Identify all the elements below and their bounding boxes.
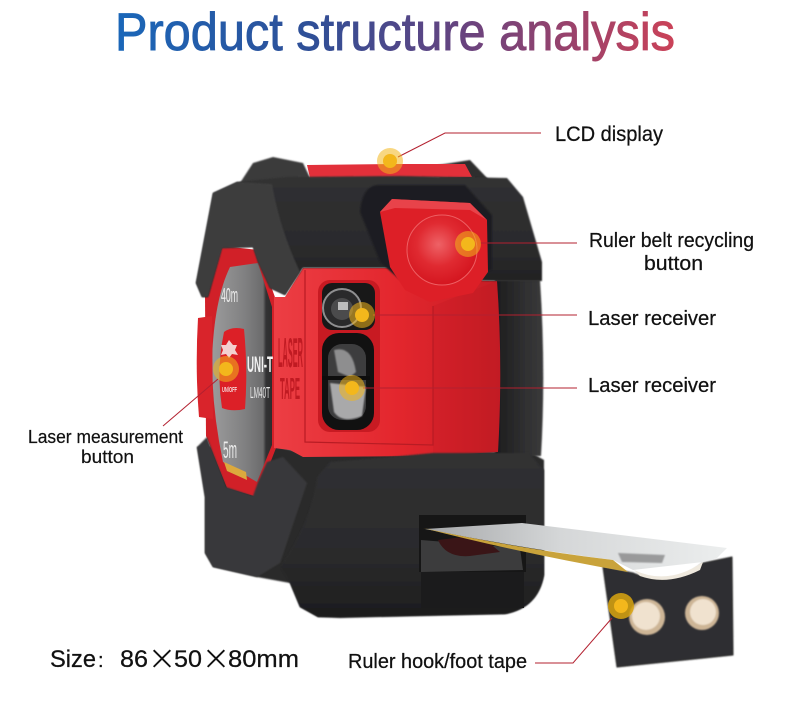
rear bump left: [238, 157, 312, 186]
printed scale text: 40m: [221, 285, 238, 307]
label: ruler belt recycling button: [589, 230, 754, 275]
left face: LM40T: [250, 385, 270, 402]
right black strip: [495, 280, 543, 456]
rivet right: [685, 596, 719, 630]
label: ruler belt recycling button: Ruler belt recycling: [589, 230, 754, 252]
gray face: [212, 263, 272, 482]
printed scale text: UN/OFF: [222, 387, 237, 394]
label: laser measurement button: Laser measurement: [28, 427, 183, 447]
tape recycling button: [380, 199, 488, 302]
rear bump right: [438, 160, 489, 184]
body right shading: [433, 281, 500, 456]
label: size: 80mm: [228, 646, 299, 673]
laser receiver lens: [322, 333, 374, 430]
hotspot: ruler belt recycling button: [455, 231, 481, 257]
printed scale text: [221, 285, 273, 464]
laser window frame: [318, 280, 380, 432]
label: size: 86: [120, 646, 148, 673]
hotspot: laser receiver upper: [349, 302, 375, 328]
side printing LASER TAPE: [278, 329, 303, 406]
label: size: ×: [148, 638, 176, 678]
label: size: [50, 638, 299, 678]
printed scale text: 5m: [223, 437, 237, 464]
ruler hook: [603, 557, 733, 667]
label: laser receiver lower: Laser receiver: [588, 375, 716, 397]
hotspot: ruler hook: [608, 593, 634, 619]
red body: [274, 268, 500, 457]
left red tab: [197, 316, 213, 419]
laser emitter lens: [322, 283, 375, 330]
label: laser receiver upper: Laser receiver: [588, 308, 716, 330]
label: size: Size: [50, 646, 96, 673]
left face: [197, 246, 276, 497]
tape blade: [423, 523, 727, 580]
cap left facet: [196, 182, 300, 297]
label: LCD display: LCD display: [555, 123, 663, 146]
on/off button: [219, 328, 246, 410]
label: size: :: [98, 650, 104, 672]
tape slot: [419, 515, 526, 608]
lower black housing: [280, 453, 544, 618]
product: laser tape measure: TAPE: [280, 371, 300, 406]
label: size: ×: [202, 638, 230, 678]
upper black cap: [196, 176, 542, 297]
product: laser tape measure: [196, 157, 733, 667]
hotspot: laser receiver lower: [339, 375, 365, 401]
label: size: 50: [174, 646, 202, 673]
title: Product structure analysis: [115, 3, 675, 62]
label: laser measurement button: [28, 427, 183, 467]
label: ruler belt recycling button: button: [644, 253, 703, 275]
product: laser tape measure: LASER: [278, 329, 303, 376]
hotspot: LCD display: [377, 148, 403, 174]
button bezel: [360, 185, 492, 280]
yellow ruler sticker: [224, 462, 247, 480]
rivet left: [629, 599, 665, 635]
red top strip: LCD display area: [307, 164, 472, 178]
power symbol: [221, 340, 238, 358]
overall lower silhouette: [197, 445, 544, 617]
product: laser tape measure: UNI-T: [247, 352, 273, 377]
body panel seams: [305, 270, 433, 445]
hotspot: laser measurement button: [213, 356, 239, 382]
lower left claw: [197, 437, 307, 577]
callout lines: [163, 133, 612, 663]
label: laser measurement button: button: [81, 447, 134, 467]
label: ruler hook/foot tape: Ruler hook/foot tape: [348, 651, 527, 673]
red rim: [205, 246, 276, 497]
